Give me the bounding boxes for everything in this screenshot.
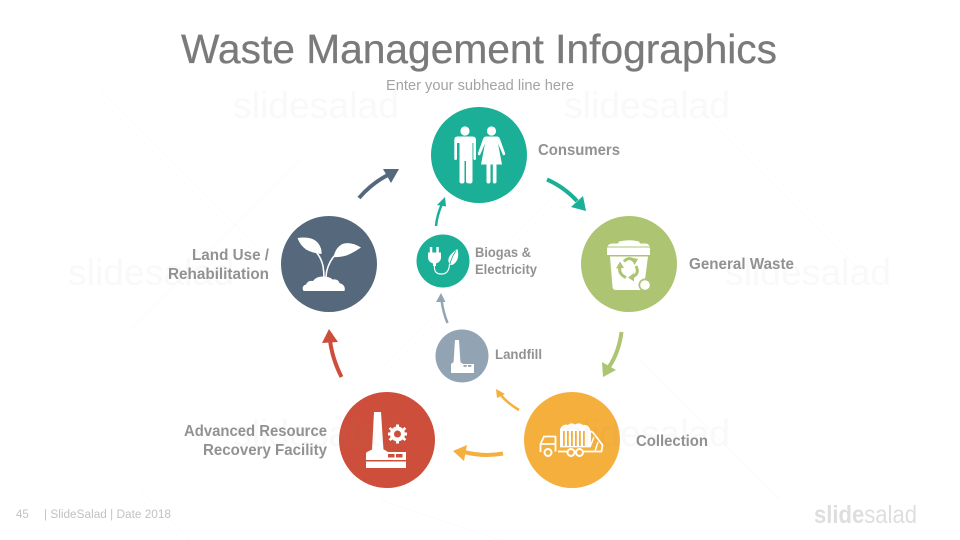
circle: advanced resource recovery facility	[339, 392, 435, 488]
panel: collection	[524, 392, 708, 488]
title: Waste Management Infographics	[181, 26, 777, 72]
panel: biogas and electricity	[416, 234, 537, 288]
label: biogas and electricity	[475, 244, 537, 277]
circle: landfill	[436, 330, 488, 382]
label: land use rehabilitation	[168, 247, 270, 283]
icon: recycling bin	[607, 240, 652, 292]
footer: logo: slidesalad	[814, 501, 917, 529]
panel: landfill	[436, 330, 542, 382]
text: slidesalad	[564, 85, 730, 126]
icon: man and woman	[454, 126, 505, 184]
text: slidesalad	[725, 252, 891, 293]
label: advanced resource recovery facility	[184, 423, 327, 459]
circle: consumers	[431, 107, 527, 203]
panel: consumers	[431, 107, 620, 203]
arrow: collection to advanced resource recovery	[453, 445, 503, 461]
arrow: general waste to collection	[602, 332, 622, 377]
panel: land use	[168, 216, 377, 312]
circle: general waste	[581, 216, 677, 312]
label: general waste: General Waste	[689, 256, 794, 273]
label: biogas and electricity: Biogas &	[475, 244, 531, 260]
arrow: land use to consumers	[359, 169, 399, 198]
arrow: advanced resource recovery to land use	[322, 329, 342, 377]
icon: garbage truck	[540, 423, 602, 456]
footer: page number and date: | SlideSalad | Date 2018	[44, 509, 171, 521]
circle: collection	[524, 392, 620, 488]
icon: sprout	[298, 238, 361, 291]
label: landfill: Landfill	[495, 346, 542, 362]
icon: factory with gear	[366, 412, 407, 468]
icon: landfill plant	[451, 340, 474, 373]
footer: page number and date: 45	[16, 509, 29, 521]
arrow: collection to landfill	[496, 389, 519, 410]
circle: land use	[281, 216, 377, 312]
arrow: biogas to consumers	[436, 197, 446, 226]
panel: advanced resource recovery facility	[184, 392, 435, 488]
subhead: Enter your subhead line here	[386, 78, 574, 94]
label: biogas and electricity: Electricity	[475, 261, 537, 277]
circle: biogas	[416, 234, 470, 288]
label: consumers: Consumers	[538, 142, 620, 159]
panel: general waste	[581, 216, 794, 312]
label: land use rehabilitation: Land Use /	[192, 247, 270, 264]
text: slidesalad	[233, 85, 399, 126]
text: slidesalad	[564, 413, 730, 454]
icon: plug and leaf	[428, 247, 458, 274]
label: advanced resource recovery facility: Recovery Facility	[203, 442, 327, 459]
text: slidesalad	[233, 413, 399, 454]
label: advanced resource recovery facility: Advanced Resource	[184, 423, 327, 440]
arrow: consumers to general waste	[547, 180, 586, 211]
label: collection: Collection	[636, 433, 708, 450]
arrow: landfill to biogas	[436, 293, 448, 323]
label: land use rehabilitation: Rehabilitation	[168, 266, 269, 283]
text: slidesalad	[68, 252, 234, 293]
